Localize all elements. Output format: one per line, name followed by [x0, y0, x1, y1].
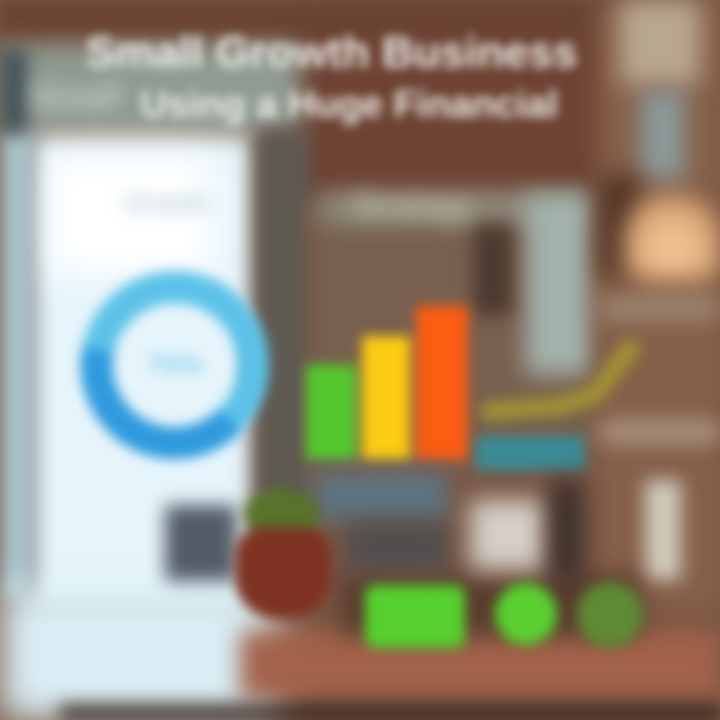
donut blue arc	[97, 350, 230, 443]
background: shelf top blue grey	[640, 90, 685, 180]
background: dark shelf recess	[600, 175, 640, 275]
background: dark top left post	[0, 48, 28, 133]
donut track	[97, 287, 253, 443]
background: dark stripe	[474, 225, 512, 315]
background: grey band	[320, 192, 590, 224]
background: shelf line mid	[600, 300, 720, 316]
background: top beam	[0, 0, 620, 38]
button: green pill	[365, 585, 465, 648]
card: white	[470, 500, 546, 570]
card: blue grey	[312, 472, 447, 522]
icon: green circle	[495, 583, 557, 645]
table shelf dark	[340, 575, 640, 635]
donut chart	[71, 262, 278, 469]
card: dark grey left	[165, 505, 237, 581]
background: brown wall	[290, 20, 620, 200]
background: upper left wall	[0, 45, 300, 133]
background: left window frame	[0, 130, 35, 600]
background: central column	[255, 130, 310, 500]
title	[82, 28, 582, 132]
background: shelf upright	[645, 480, 681, 580]
background: lower left floor	[0, 590, 280, 720]
background: pale panel	[525, 195, 593, 375]
dark post	[550, 480, 582, 580]
bar: yellow	[362, 336, 410, 460]
background: window	[30, 135, 255, 615]
subtitle centre: Strategy	[352, 190, 472, 223]
background: right shelves	[597, 0, 720, 610]
table top	[240, 630, 720, 700]
card: dark label	[345, 522, 450, 570]
table bottom shadow	[60, 706, 720, 720]
title line 1: Small Growth Business	[86, 28, 577, 77]
plant foliage	[244, 489, 320, 539]
background: bright window pane	[45, 155, 215, 275]
background: shelf line low	[600, 425, 720, 439]
bar: orange	[416, 306, 468, 460]
trend line	[476, 334, 644, 426]
background: middle wall	[312, 200, 597, 470]
bar: green	[306, 365, 356, 460]
donut centre label: 75%	[147, 349, 203, 380]
subtitle left: Growth	[125, 190, 209, 217]
title line 2: Using a Huge Financial	[140, 84, 558, 126]
background: shelf top pale	[620, 0, 700, 85]
pot	[235, 527, 331, 619]
icon: plant pot	[226, 484, 336, 627]
left title fragment: Small	[30, 78, 121, 116]
teal label	[476, 436, 584, 470]
icon: dark green circle	[577, 582, 643, 648]
bar chart	[298, 297, 477, 468]
icon: hanging lamp	[625, 195, 720, 280]
